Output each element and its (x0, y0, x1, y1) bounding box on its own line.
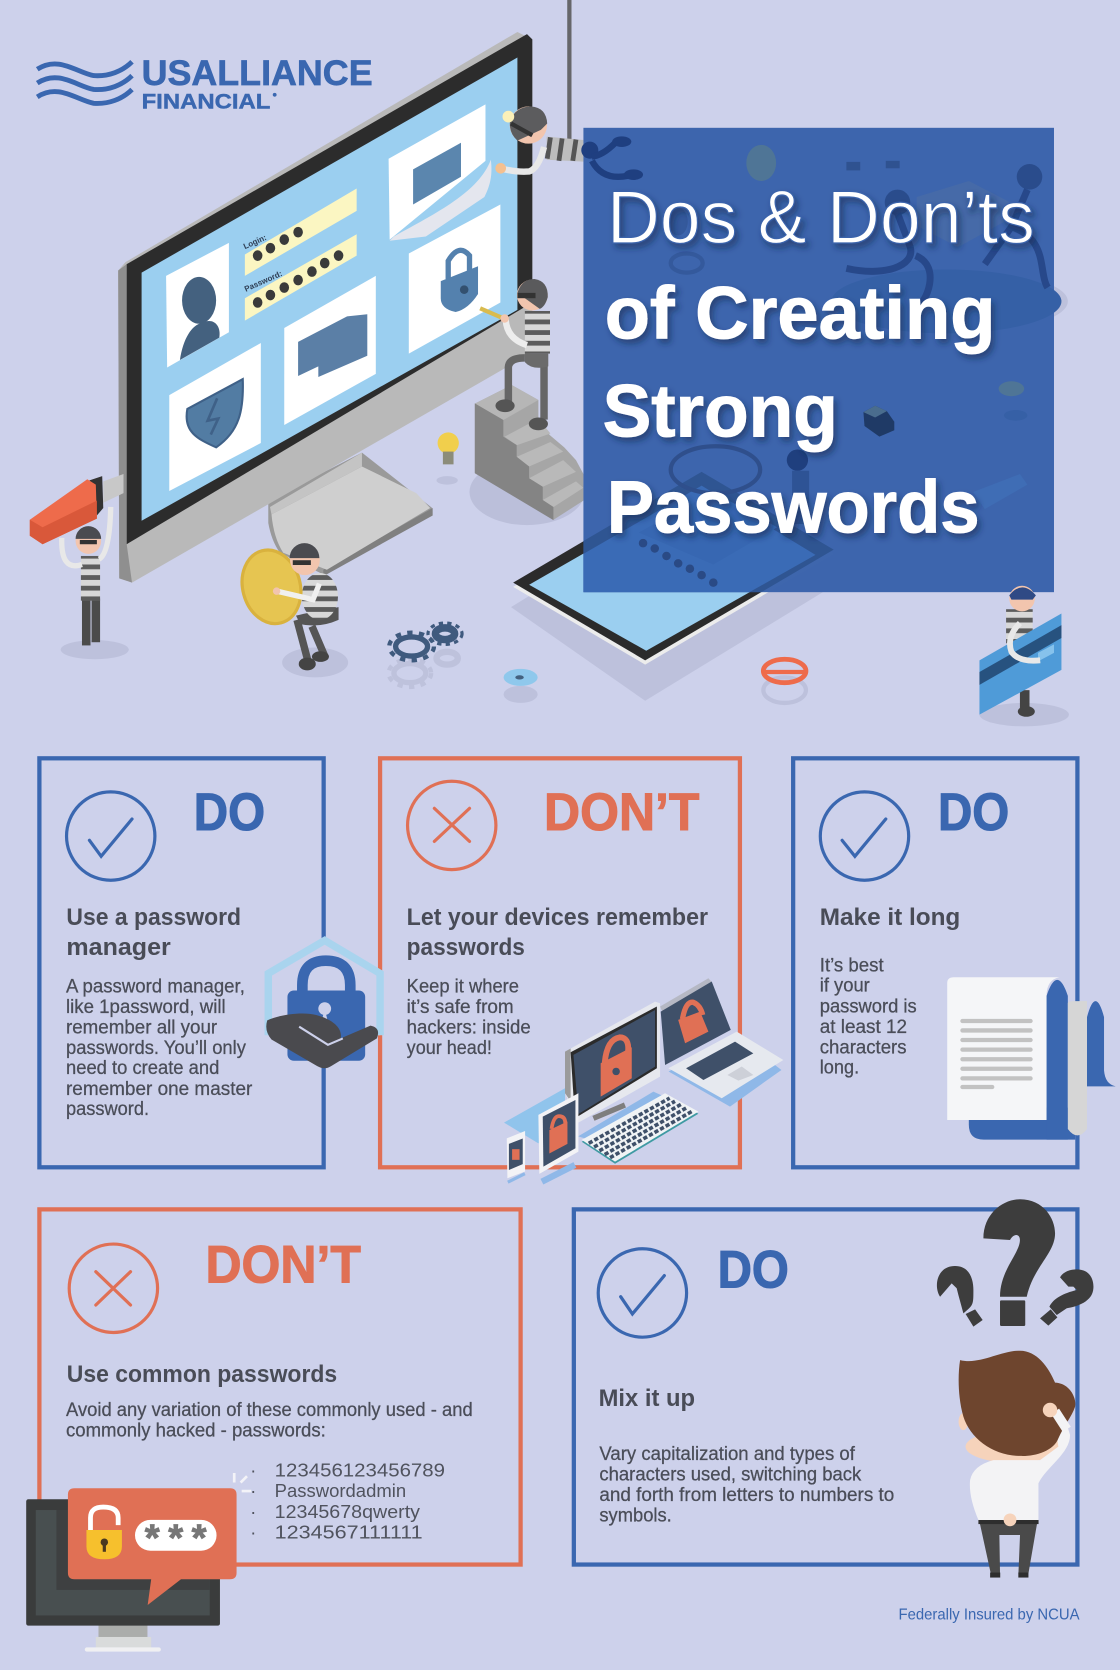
illustration: devices with locks (504, 978, 783, 1182)
body text: need to create and (66, 1057, 219, 1079)
laptop (660, 978, 783, 1107)
title text: Strong (603, 370, 838, 453)
body text: password. (66, 1098, 149, 1120)
list of common passwords: · (250, 1460, 256, 1481)
panel: do use a password manager (39, 758, 324, 1167)
illustration: soft ground shadow (838, 269, 1068, 333)
title text (603, 176, 1035, 549)
label: DON'T: DON’T (205, 1235, 361, 1294)
tile: person (166, 243, 229, 367)
body text: remember one master (66, 1078, 253, 1100)
body text: commonly hacked - passwords: (66, 1420, 326, 1442)
body text: password is (820, 995, 917, 1017)
list of common passwords: · (250, 1480, 256, 1501)
title panel (581, 128, 1061, 592)
illustration: man scratching head (959, 1351, 1075, 1578)
body text: A password manager, (66, 976, 245, 998)
panel: do make it long (793, 758, 1077, 1167)
illustration: thief with credit card (979, 586, 1069, 726)
body text: characters used, switching back (599, 1463, 862, 1485)
list of common passwords (250, 1460, 445, 1543)
icon: open padlock (86, 1507, 122, 1559)
body text (66, 1399, 473, 1442)
heading: Use a password (66, 904, 241, 931)
body text: if your (820, 975, 870, 997)
body text: like 1password, will (66, 996, 226, 1018)
panel: don't let your devices remember passwords (380, 758, 740, 1167)
illustration: USB drive (30, 474, 123, 544)
list of common passwords: Passwordadmin (275, 1480, 406, 1501)
logo: USAlliance Financial (37, 54, 373, 114)
panel: don't use common passwords (39, 1209, 521, 1565)
heading (407, 904, 708, 961)
body text: remember all your (66, 1017, 218, 1039)
heading: Mix it up (599, 1385, 695, 1412)
label: DO: DO (718, 1241, 789, 1300)
tile: padlock (409, 204, 500, 354)
body text: Vary capitalization and types of (599, 1443, 855, 1465)
body text: it’s safe from (407, 996, 514, 1018)
body text: your head! (407, 1037, 492, 1059)
list of common passwords: · (250, 1522, 256, 1543)
label: DO: DO (194, 783, 265, 842)
body text: passwords. You’ll only (66, 1037, 246, 1059)
body text: Avoid any variation of these commonly used - and (66, 1399, 473, 1421)
phone (507, 1131, 525, 1182)
body text: characters (820, 1036, 907, 1058)
body text: hackers: inside (407, 1017, 531, 1039)
icon: question marks (937, 1199, 1093, 1327)
speech bubble (68, 1488, 237, 1605)
keyboard (582, 1093, 698, 1164)
illustration: hanging thief (495, 106, 583, 174)
body text: at least 12 (820, 1016, 907, 1038)
illustration: red ring (763, 659, 806, 703)
body text: long. (820, 1057, 859, 1079)
tablet device (538, 1093, 578, 1182)
illustration: thief holding USB (61, 507, 129, 659)
login fields (242, 189, 357, 321)
panel: do mix it up (574, 1209, 1077, 1565)
title text: Passwords (607, 466, 979, 549)
illustration: tablet (511, 472, 837, 701)
title text: of Creating (605, 272, 995, 355)
body text: symbols. (599, 1505, 672, 1527)
monitor stand (268, 453, 433, 576)
illustration: gears (389, 623, 462, 687)
icon: check circle (820, 792, 909, 880)
heading: Let your devices remember (407, 904, 708, 931)
body text (820, 954, 917, 1079)
illustration: rope (567, 0, 571, 144)
icon: check circle (67, 792, 155, 880)
body text (599, 1443, 894, 1527)
icon: check circle (598, 1249, 687, 1337)
list of common passwords: 12345678qwerty (275, 1501, 421, 1522)
sparks (234, 1473, 251, 1491)
body text (66, 976, 253, 1120)
list of common passwords: 123456123456789 (275, 1460, 445, 1481)
illustration: computer monitor with login screen (118, 32, 532, 583)
heading (66, 904, 241, 961)
illustration: stairs (470, 385, 584, 525)
illustration: thief with coin (234, 543, 348, 677)
icon: hand holding padlock (266, 940, 380, 1068)
footer: federally insured: Federally Insured by NCUA (899, 1606, 1080, 1623)
icon: x circle (408, 781, 496, 870)
heading: manager (66, 934, 171, 961)
heading: Make it long (820, 904, 960, 931)
body text (407, 976, 531, 1059)
tile: folder (389, 104, 491, 241)
list of common passwords: · (250, 1501, 256, 1522)
logo: USAlliance Financial: USALLIANCE (142, 54, 373, 93)
title text: Dos & Don’ts (607, 176, 1035, 260)
illustration: desktop monitor with password bubble (26, 1488, 237, 1652)
body text: and forth from letters to numbers to (599, 1484, 894, 1506)
icon: x circle (69, 1244, 158, 1332)
illustration: thief on stairs with key (480, 279, 550, 430)
login fields: Password: (243, 269, 284, 294)
tile: envelope (284, 276, 376, 425)
illustration: light bulb (437, 432, 459, 485)
illustration: disc (504, 669, 538, 703)
logo: USAlliance Financial: FINANCIAL (142, 90, 270, 114)
login fields: Login: (242, 233, 268, 251)
faded illustration behind title (581, 136, 1061, 592)
label: DON'T: DON’T (544, 783, 699, 842)
heading: Use common passwords (67, 1361, 337, 1388)
icon: scroll document (947, 977, 1116, 1140)
list of common passwords: 1234567111111 (275, 1522, 423, 1543)
heading: passwords (407, 934, 525, 961)
body text: Keep it where (407, 976, 519, 998)
password field: *** (145, 1517, 207, 1560)
tile: shield (169, 343, 261, 491)
label: DO: DO (938, 783, 1009, 842)
body text: It’s best (820, 954, 884, 976)
desktop monitor (565, 1002, 660, 1123)
